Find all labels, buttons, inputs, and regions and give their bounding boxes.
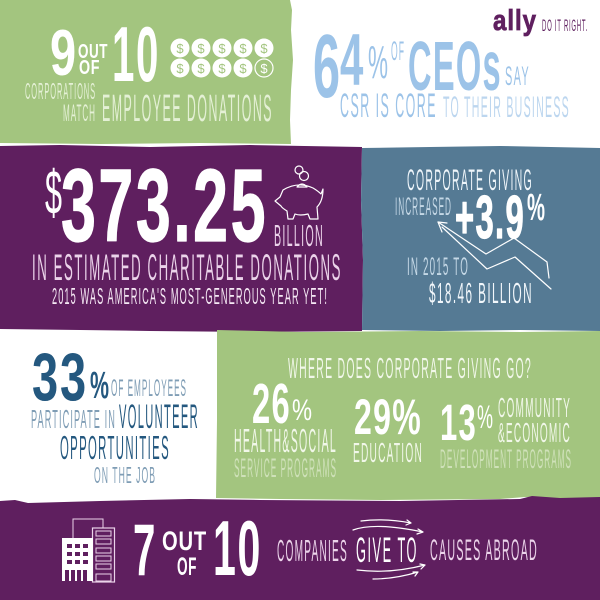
panel: volunteer opportunities: PARTICIPATE IN xyxy=(31,404,116,434)
text: VOLUNTEER xyxy=(119,398,199,436)
panel: where corporate giving goes: SERVICE PROGRAMS xyxy=(234,453,337,483)
panel: charitable donations: BILLION xyxy=(274,218,324,253)
icon: dollar coins: $ xyxy=(239,61,247,76)
statistic: 7 out of 10: 10 xyxy=(213,504,262,592)
statistic: 26% health and social: % xyxy=(292,394,312,427)
statistic: 9 out of 10 xyxy=(50,10,160,98)
icon: dollar coins: $ xyxy=(197,41,205,56)
panel: where corporate giving goes: EDUCATION xyxy=(353,437,423,468)
panel: causes abroad: COMPANIES xyxy=(277,533,348,568)
statistic: 33%: 33 xyxy=(32,339,88,415)
statistic: 13% community and economic: 13 xyxy=(440,394,477,451)
panel: 64% of CEOs: 6 xyxy=(313,17,342,117)
panel: causes abroad xyxy=(0,496,600,600)
text: corporations match employee donations xyxy=(25,78,273,130)
panel: where corporate giving goes: HEALTH&SOCIAL xyxy=(234,422,337,459)
logo: ally do it right xyxy=(493,5,588,37)
statistic: $373.25 xyxy=(45,148,268,263)
panel: employee donations xyxy=(0,0,293,144)
statistic: 26% health and social: 26 xyxy=(252,372,291,436)
panel: 64% of CEOs: SAY xyxy=(505,61,530,91)
panel: charitable donations xyxy=(0,145,363,332)
panel: causes abroad: GIVE TO xyxy=(356,531,418,570)
statistic: $373.25: $ xyxy=(45,159,62,228)
text: corporations match employee donations: CORPORATIONS xyxy=(25,78,96,104)
icon: dollar coins xyxy=(170,38,274,78)
statistic: 7 out of 10: 7 xyxy=(133,510,157,591)
statistic: 9 out of 10: 10 xyxy=(112,10,160,98)
icon: dollar coins: $ xyxy=(176,41,184,56)
statistic: 7 out of 10: OUT xyxy=(162,526,207,556)
icon: rising arrow xyxy=(438,222,551,289)
text: OF EMPLOYEES xyxy=(111,375,187,402)
panel: volunteer opportunities xyxy=(31,339,199,488)
statistic: 26% health and social xyxy=(234,372,337,483)
panel: 64% of CEOs: 4 xyxy=(340,20,365,101)
statistic: 29% education: 29% xyxy=(354,389,422,445)
panel: corporate giving increase xyxy=(361,146,600,331)
statistic: 13% community and economic xyxy=(440,392,572,474)
panel: 64% of CEOs: % xyxy=(368,36,388,88)
panel: 64% of CEOs xyxy=(313,17,570,125)
statistic: 9 out of 10: OUT xyxy=(78,41,108,63)
panel: 64% of CEOs: OF xyxy=(391,36,405,66)
statistic: 7 out of 10 xyxy=(133,504,262,592)
icon: dollar coins: $ xyxy=(197,61,205,76)
statistic: +3.9%: % xyxy=(527,187,545,229)
panel: volunteer opportunities: ON THE JOB xyxy=(94,462,156,488)
icon: dollar coins: $ xyxy=(218,41,226,56)
icon: dollar coins: $ xyxy=(260,61,268,76)
text: corporations match employee donations: MATCH xyxy=(63,100,96,127)
icon: piggy bank xyxy=(275,166,323,219)
statistic: 7 out of 10: OF xyxy=(177,553,197,581)
statistic: 33%: % xyxy=(90,365,109,407)
statistic: 29% education xyxy=(353,389,423,468)
icon: curved arrows xyxy=(353,520,425,579)
icon: dollar coins: $ xyxy=(239,41,247,56)
statistic: 13% community and economic: % xyxy=(477,399,493,435)
logo: ally do it right: ally xyxy=(493,5,537,37)
text: OPPORTUNITIES xyxy=(60,429,170,466)
panel: corporate giving increase: IN 2015 TO xyxy=(407,253,469,281)
icon: dollar coins: $ xyxy=(218,61,226,76)
statistic: 9 out of 10: 9 xyxy=(50,16,78,89)
panel: where corporate giving goes xyxy=(216,330,600,500)
icon: dollar coins: $ xyxy=(176,61,184,76)
statistic: +3.9%: +3.9 xyxy=(455,184,525,251)
statistic: $373.25: 373.25 xyxy=(61,148,268,263)
statistic: 9 out of 10: OF xyxy=(79,57,100,79)
icon: dollar coins: $ xyxy=(260,41,268,56)
panel: 64% of CEOs: CSR IS CORE xyxy=(340,87,437,125)
icon: office buildings xyxy=(62,519,114,582)
panel: corporate giving increase: INCREASED xyxy=(395,193,452,221)
